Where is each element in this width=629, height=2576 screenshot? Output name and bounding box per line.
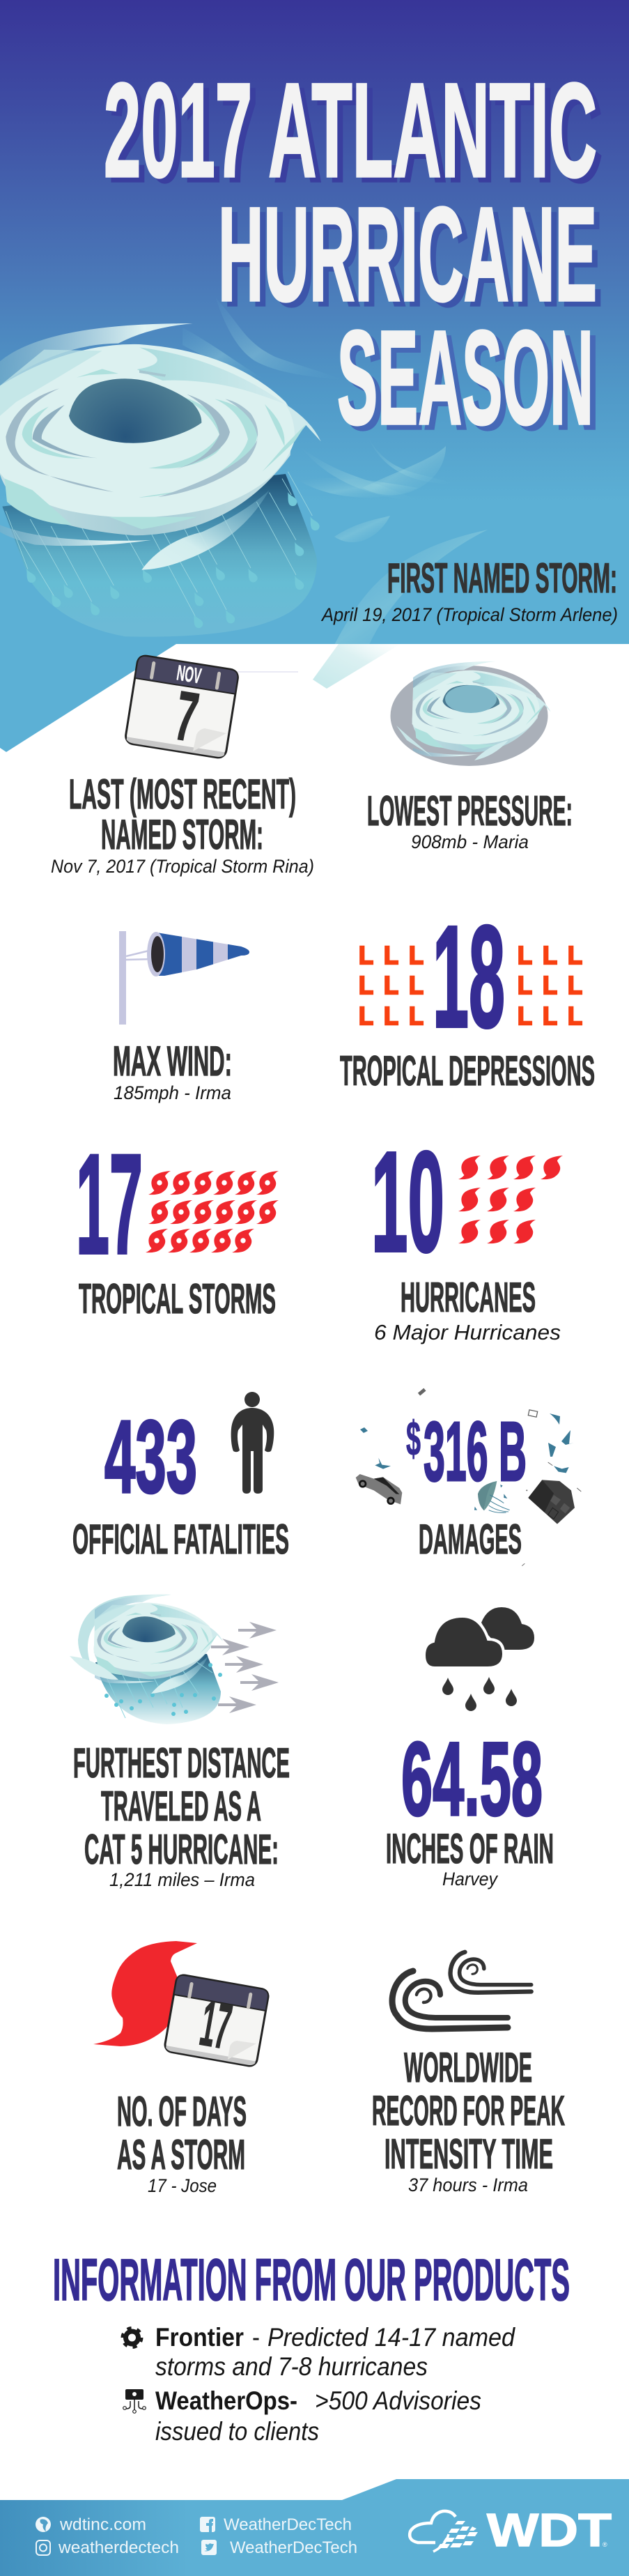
WDT logo [410,2504,612,2556]
stat: 18 with L symbols: L [543,941,557,969]
stat: 18 with L symbols: L [409,1002,424,1030]
icon: person [231,1392,274,1494]
fragments [375,1458,569,1473]
footer: facebook handle: WeatherDecTech [224,2515,352,2534]
icon: flying debris [356,1458,581,1566]
frontier text: - [252,2323,260,2352]
max wind text [113,1038,232,1103]
days as a storm text [117,2088,247,2196]
car [356,1474,402,1505]
text: TROPICAL STORMS [79,1275,276,1322]
header sky gradient [0,0,629,753]
footer: globe icon [36,2517,51,2532]
text: NO. OF DAYS [117,2088,247,2135]
stat: 18 with L symbols: L [568,941,582,969]
lowest pressure text [367,788,573,852]
icon: calendar Nov 7: 7 [170,677,203,757]
frontier text: storms and 7-8 hurricanes [155,2352,428,2381]
stat: 18 with L symbols: L [384,1002,398,1030]
days as a storm text: AS A STORM [117,2131,245,2178]
logo letters: WDT [487,2504,612,2556]
icon: storm symbol with calendar 17 [93,1941,270,2069]
stat: 18 with L symbols: L [409,971,424,999]
icon: gear [123,2328,141,2347]
icon: small debris above [360,1388,574,1457]
last named storm text: LAST (MOST RECENT) [69,771,296,818]
weatherops text [155,2386,481,2446]
last named storm text [51,771,314,877]
worldwide record text [372,2044,565,2195]
pale line behind calendar [237,671,298,673]
text: OFFICIAL FATALITIES [72,1516,289,1563]
icon: storm symbol with calendar 17: 17 [195,1988,236,2063]
stat: 18 with L symbols: L [359,971,373,999]
footer: website: wdtinc.com [59,2515,146,2534]
hurricanes label: 6 Major Hurricanes [374,1320,561,1344]
footer: instagram handle: weatherdectech [58,2538,179,2557]
worldwide record text: 37 hours - Irma [408,2175,528,2195]
weatherops text: >500 Advisories [315,2386,481,2415]
icon: calendar Nov 7: NOV [175,661,203,689]
cat 5 distance text: CAT 5 HURRICANE: [84,1826,279,1873]
stat: $316 B: $ [406,1411,421,1466]
stat: 18 with L symbols: L [518,971,532,999]
stat: 18 with L symbols: L [568,971,582,999]
stat: 17 with storm icons: 17 [76,1125,143,1284]
icon: windsock [119,927,251,1025]
first named storm: April 19, 2017 (Tropical Storm Arlene) [320,604,618,625]
title [104,55,603,457]
stat: 18 with L symbols: L [384,941,398,969]
motion arrows [211,1622,279,1713]
footer: twitter icon [201,2540,217,2555]
stat: 18 with L symbols: L [543,971,557,999]
weatherops text: issued to clients [155,2417,319,2446]
stat: 18 with L symbols: L [409,941,424,969]
stat: 18 with L symbols: L [359,1002,373,1030]
logo cloud mark [410,2511,478,2552]
max wind text: MAX WIND: [113,1038,232,1084]
stat: 18 with L symbols [359,896,582,1058]
house [528,1480,575,1524]
stat: 18 with L symbols: L [518,1002,532,1030]
first named storm [320,555,618,625]
max wind text: 185mph - Irma [114,1082,231,1103]
stat: 18 with L symbols: L [518,941,532,969]
text: FURTHEST DISTANCE [73,1740,290,1786]
hurricane cloud disc [0,323,321,546]
stat: 18 with L symbols: L [359,941,373,969]
stat: $316 B [406,1404,527,1498]
storm rain column [2,474,317,637]
stat: 18 with L symbols: L [568,1002,582,1030]
icon: calendar Nov 7 [124,654,239,762]
icon: rain clouds [424,1607,534,1711]
stat: 18 with L symbols: L [384,971,398,999]
registered mark: ® [603,2541,607,2548]
wind wisps [183,298,488,645]
days as a storm text: 17 - Jose [148,2175,217,2196]
stat: 10 with hurricane icons: 10 [371,1122,444,1282]
hurricanes label [374,1274,561,1344]
icon: moving hurricane [70,1595,223,1724]
frontier text: Frontier [155,2323,244,2352]
stat: 64.58 inches of rain [386,1720,554,1889]
umbrella [474,1481,510,1512]
decorative wedge over white area [313,644,401,689]
frontier text: Predicted 14-17 named [267,2323,515,2352]
icon: weatherops [123,2389,146,2413]
lowest pressure text: 908mb - Maria [411,831,529,852]
stat: 433: 433 [104,1400,197,1515]
frontier text [155,2323,515,2381]
cat 5 distance text [73,1740,290,1890]
icon: wind swirls [392,1952,531,2029]
cat 5 distance text: 1,211 miles – Irma [109,1869,255,1890]
stat: 18 with L symbols: L [543,1002,557,1030]
stat: 18 with L symbols: 18 [433,896,505,1058]
icon: low pressure storm [390,661,551,766]
footer band [0,2479,629,2576]
footer: instagram icon [36,2540,50,2555]
text: DAMAGES [419,1516,522,1563]
weatherops text: WeatherOps- [155,2386,297,2415]
stat: 64.58 inches of rain: Harvey [442,1869,498,1889]
rain streaks and drops [6,472,320,629]
cloud leaf [141,490,270,570]
last named storm text: NAMED STORM: [101,811,263,858]
footer: facebook icon [200,2517,215,2532]
last named storm text: Nov 7, 2017 (Tropical Storm Rina) [51,856,314,877]
footer: twitter handle: WeatherDecTech [230,2538,357,2557]
cat 5 distance text: TRAVELED AS A [101,1783,261,1830]
header: gradient sky with hurricane illustration [0,0,629,753]
